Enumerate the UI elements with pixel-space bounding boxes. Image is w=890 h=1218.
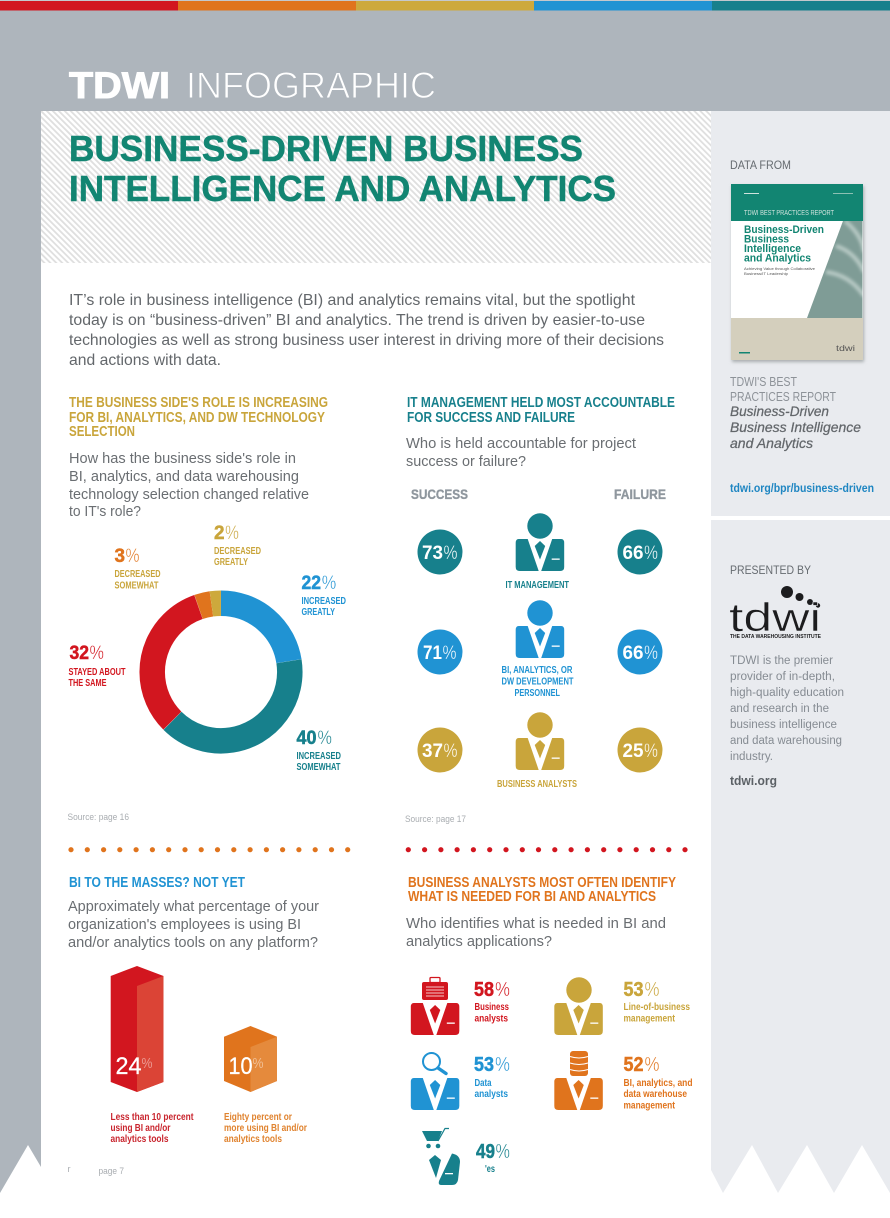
label: 3% decreased somewhat: SOMEWHAT xyxy=(114,580,158,592)
bar label: less than 10 percent: analytics tools xyxy=(110,1134,169,1145)
row: BI, analytics, or DW development personnel: PERSONNEL xyxy=(514,688,560,699)
question: How has the business side's role in xyxy=(69,450,296,467)
tdwi logo xyxy=(729,586,822,640)
row: IT management: % xyxy=(644,543,658,564)
intro paragraph xyxy=(69,292,664,369)
source: r xyxy=(68,1164,70,1174)
tdwi description: industry. xyxy=(730,751,773,763)
row: BI, analytics, or DW development personnel: DW DEVELOPMENT xyxy=(502,676,574,688)
top colour bar xyxy=(0,0,890,10)
item: data analysts 53%: analysts xyxy=(474,1089,508,1100)
label: 2% decreased greatly: 2 xyxy=(214,523,224,544)
donut chart xyxy=(124,575,318,769)
question: Who identifies what is needed in BI and xyxy=(406,915,666,932)
item: partially hidden 49%: 'es xyxy=(485,1164,495,1175)
row: BI, analytics, or DW development personnel: 66 xyxy=(622,643,644,664)
item: line-of-business management 53%: management xyxy=(624,1014,676,1024)
report cover: Intelligence xyxy=(744,243,801,255)
bar: 24%: 24 xyxy=(116,1053,142,1080)
item: business analysts 58%: Business xyxy=(474,1002,509,1013)
row: business analysts: BUSINESS ANALYSTS xyxy=(497,779,577,790)
row: BI, analytics, or DW development personnel: % xyxy=(442,643,457,664)
item: line-of-business management 53%: % xyxy=(644,979,660,1001)
label: 3% decreased somewhat xyxy=(114,546,160,592)
source: Source: page 16 xyxy=(68,812,129,822)
tdwi description: and research in the xyxy=(730,703,829,715)
label: 40% increased somewhat: 40 xyxy=(296,728,316,749)
row: BI, analytics, or DW development personnel: BI, ANALYTICS, OR xyxy=(502,665,573,676)
row: BI, analytics, or DW development personnel: % xyxy=(644,643,658,664)
header: TDWI Infographic: TDWI xyxy=(69,65,170,106)
item: BI, analytics, and data warehouse management 52% xyxy=(554,1051,692,1112)
label: 22% increased greatly: GREATLY xyxy=(302,607,335,618)
item: BI, analytics, and data warehouse management 52%: 52 xyxy=(624,1054,644,1076)
row: business analysts: % xyxy=(644,741,658,762)
label: 3% decreased somewhat: 3 xyxy=(114,546,125,567)
icon: developer xyxy=(516,600,564,658)
tdwi description: business intelligence xyxy=(730,719,837,731)
label: 22% increased greatly: 22 xyxy=(302,573,321,594)
row: business analysts xyxy=(418,712,662,790)
item: BI, analytics, and data warehouse management 52%: management xyxy=(624,1100,676,1112)
column headers: SUCCESS xyxy=(411,486,468,502)
item: data analysts 53%: Data xyxy=(474,1078,492,1089)
icon: cart person xyxy=(422,1128,460,1185)
source: Source: page 17 xyxy=(405,814,466,824)
row: BI, analytics, or DW development personnel xyxy=(418,600,662,699)
heading xyxy=(408,875,676,905)
label: 32% stayed about the same: 32 xyxy=(70,643,89,664)
item: BI, analytics, and data warehouse management 52%: % xyxy=(644,1054,660,1076)
question: BI, analytics, and data warehousing xyxy=(69,468,299,485)
heading: BI TO THE MASSES? NOT YET xyxy=(69,875,245,891)
label: 2% decreased greatly: % xyxy=(225,523,239,544)
item: line-of-business management 53%: Line-of-business xyxy=(624,1002,690,1013)
heading: BUSINESS ANALYSTS MOST OFTEN IDENTIFY xyxy=(408,875,676,891)
report name: Business Intelligence xyxy=(730,419,861,435)
bar label: eighty percent or more: Eighty percent or xyxy=(224,1112,292,1123)
tdwi description: TDWI is the premier xyxy=(730,655,833,667)
report cover: TDWI BEST PRACTICES REPORT xyxy=(744,208,834,217)
item: line-of-business management 53% xyxy=(554,977,690,1035)
header: TDWI Infographic xyxy=(69,65,436,106)
question: organization's employees is using BI xyxy=(68,916,301,933)
item: business analysts 58%: % xyxy=(495,979,510,1001)
column headers: FAILURE xyxy=(614,486,666,502)
item: BI, analytics, and data warehouse management 52%: data warehouse xyxy=(624,1089,687,1100)
icon: briefcase person xyxy=(411,978,459,1035)
title band xyxy=(41,111,711,263)
bar: 10%: 10 xyxy=(228,1053,252,1080)
label: 40% increased somewhat xyxy=(296,728,341,773)
icon: database person xyxy=(554,1051,603,1110)
bar label: eighty percent or more xyxy=(224,1112,307,1145)
question xyxy=(69,450,309,520)
item: BI, analytics, and data warehouse management 52%: BI, analytics, and xyxy=(624,1078,692,1089)
bar label: less than 10 percent: using BI and/or xyxy=(110,1123,171,1134)
heading: THE BUSINESS SIDE'S ROLE IS INCREASING xyxy=(69,395,328,411)
row: IT management: 66 xyxy=(622,543,644,564)
heading: FOR BI, ANALYTICS, AND DW TECHNOLOGY xyxy=(69,410,325,426)
intro paragraph: today is on “business-driven” BI and analytics. The trend is driven by easier-to-use xyxy=(69,312,645,329)
bar: 10%: % xyxy=(252,1055,264,1072)
question: success or failure? xyxy=(406,453,526,470)
panel: BI to the masses xyxy=(68,875,319,1176)
label: 40% increased somewhat: % xyxy=(318,728,332,749)
icon: analyst xyxy=(516,712,564,770)
tdwi description: provider of in-depth, xyxy=(730,671,835,683)
intro paragraph: technologies as well as strong business user interest in driving more of their decisions xyxy=(69,332,664,349)
item: business analysts 58% xyxy=(411,978,510,1035)
report cover: and Analytics xyxy=(744,252,811,264)
label: 32% stayed about the same: THE SAME xyxy=(68,678,107,689)
report name: TDWI'S BEST xyxy=(730,375,797,389)
question xyxy=(68,898,319,951)
item: data analysts 53%: 53 xyxy=(474,1054,494,1076)
panel: who identifies needs xyxy=(406,875,692,1185)
bar label: eighty percent or more: more using BI and/or xyxy=(224,1123,307,1134)
tdwi description: and data warehousing xyxy=(730,735,842,747)
report cover: tdwi xyxy=(836,344,855,353)
question xyxy=(406,435,637,470)
item: data analysts 53%: % xyxy=(495,1054,510,1076)
heading xyxy=(69,395,328,440)
label: 3% decreased somewhat: % xyxy=(126,546,140,567)
report link: tdwi.org/bpr/business-driven xyxy=(730,483,874,495)
row: business analysts: % xyxy=(444,741,458,762)
question: Who is held accountable for project xyxy=(406,435,637,452)
intro paragraph: IT’s role in business intelligence (BI) and analytics remains vital, but the spotlight xyxy=(69,292,636,309)
icon: magnifier person xyxy=(411,1053,459,1110)
label: 2% decreased greatly xyxy=(214,523,261,568)
label: 22% increased greatly xyxy=(302,573,346,618)
label: 32% stayed about the same: STAYED ABOUT xyxy=(68,667,126,678)
question: analytics applications? xyxy=(406,933,552,950)
header: TDWI Infographic: INFOGRAPHIC xyxy=(186,65,436,106)
item: data analysts 53% xyxy=(411,1053,510,1110)
report cover: Business xyxy=(744,234,789,246)
bar: 24% xyxy=(111,966,164,1092)
label: 3% decreased somewhat: DECREASED xyxy=(114,569,160,580)
row: BI, analytics, or DW development personnel: 71 xyxy=(423,643,442,664)
report cover xyxy=(731,184,864,362)
label: 32% stayed about the same xyxy=(68,643,126,689)
panel: business side's role xyxy=(68,395,346,822)
column headers xyxy=(411,486,666,502)
bar label: less than 10 percent: Less than 10 percent xyxy=(110,1112,194,1123)
item: business analysts 58%: 58 xyxy=(474,979,494,1001)
icon: person xyxy=(554,977,603,1035)
item: partially hidden 49%: 49 xyxy=(476,1141,495,1163)
question: and/or analytics tools on any platform? xyxy=(68,934,318,951)
bar: 24%: % xyxy=(142,1055,152,1072)
panel: accountability xyxy=(405,395,675,824)
report cover: Business/IT Leadership xyxy=(744,271,789,276)
label: 2% decreased greatly: GREATLY xyxy=(214,557,248,568)
sidebar: presented by panel xyxy=(711,520,890,1193)
tdwi logo: THE DATA WAREHOUSING INSTITUTE xyxy=(730,634,822,640)
label: 32% stayed about the same: % xyxy=(90,643,104,664)
title: INTELLIGENCE AND ANALYTICS xyxy=(69,168,616,209)
heading: SELECTION xyxy=(69,424,135,440)
report name xyxy=(730,375,861,451)
heading xyxy=(407,395,675,426)
source: page 7 xyxy=(98,1166,124,1176)
intro paragraph: and actions with data. xyxy=(69,352,221,369)
bar: 10% xyxy=(224,1026,277,1092)
bar label: eighty percent or more: analytics tools xyxy=(224,1134,282,1145)
label: 40% increased somewhat: SOMEWHAT xyxy=(296,762,340,773)
report cover: Business-Driven xyxy=(744,224,824,236)
question xyxy=(406,915,666,950)
question: Approximately what percentage of your xyxy=(68,898,319,915)
question: to IT's role? xyxy=(69,503,141,520)
sidebar: data from panel xyxy=(711,111,890,516)
item: business analysts 58%: analysts xyxy=(474,1014,508,1024)
row: IT management: % xyxy=(444,543,458,564)
row: IT management: IT MANAGEMENT xyxy=(506,580,569,591)
bar label: less than 10 percent xyxy=(110,1112,194,1145)
row: business analysts: 37 xyxy=(422,741,443,762)
label: 2% decreased greatly: DECREASED xyxy=(214,546,261,557)
row: IT management xyxy=(418,513,662,591)
data from label: DATA FROM xyxy=(730,158,791,172)
heading: FOR SUCCESS AND FAILURE xyxy=(407,410,575,426)
row: business analysts: 25 xyxy=(622,741,644,762)
question: technology selection changed relative xyxy=(69,486,309,503)
heading: IT MANAGEMENT HELD MOST ACCOUNTABLE xyxy=(407,395,675,411)
report name: PRACTICES REPORT xyxy=(730,390,836,404)
label: 40% increased somewhat: INCREASED xyxy=(296,751,341,762)
row: IT management: 73 xyxy=(422,543,443,564)
item: line-of-business management 53%: 53 xyxy=(624,979,644,1001)
report cover: Achieving Value through Collaborative xyxy=(744,266,816,271)
source xyxy=(68,1164,124,1176)
presented by label: PRESENTED BY xyxy=(730,563,811,577)
title xyxy=(69,128,616,209)
tdwi description: high-quality education xyxy=(730,687,844,699)
tdwi logo: tdwi xyxy=(729,596,821,640)
tdwi description xyxy=(730,655,844,763)
heading: WHAT IS NEEDED FOR BI AND ANALYTICS xyxy=(408,889,656,905)
report name: and Analytics xyxy=(730,435,813,451)
label: 22% increased greatly: % xyxy=(322,573,336,594)
item: partially hidden 49%: % xyxy=(496,1141,510,1163)
item: partially hidden 49% xyxy=(422,1128,510,1185)
title: BUSINESS-DRIVEN BUSINESS xyxy=(69,128,583,169)
tdwi link: tdwi.org xyxy=(730,773,777,788)
label: 22% increased greatly: INCREASED xyxy=(302,596,346,607)
icon: IT manager xyxy=(516,513,564,571)
report name: Business-Driven xyxy=(730,403,829,419)
